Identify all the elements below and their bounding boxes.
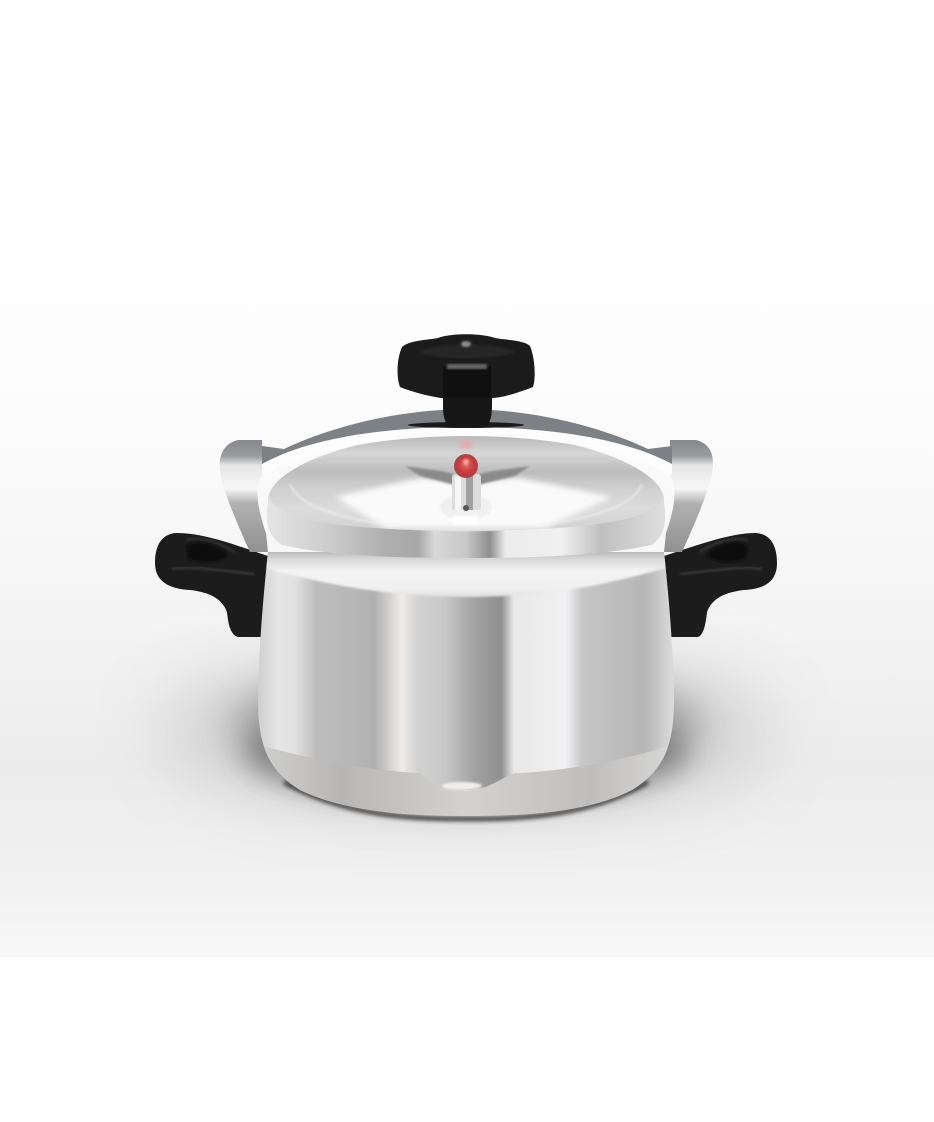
arch grey upper band xyxy=(262,409,672,470)
lid xyxy=(267,433,665,558)
knob stem xyxy=(443,368,492,427)
locking knob xyxy=(398,334,535,428)
red reflection xyxy=(459,439,473,449)
left side clamp xyxy=(220,440,268,552)
product photo: pressure cooker xyxy=(0,334,934,956)
arch silver strip xyxy=(262,427,672,475)
lid bridge arch xyxy=(262,409,672,475)
right side clamp xyxy=(664,440,713,552)
body base band xyxy=(264,746,668,816)
left handle hole xyxy=(186,542,228,562)
lid dome xyxy=(268,433,664,545)
studio backdrop and floor shadow xyxy=(0,548,934,956)
knob slot shadow xyxy=(408,422,524,428)
body shoulder highlight xyxy=(266,552,666,598)
right handle xyxy=(662,533,777,637)
right handle hole xyxy=(706,542,748,562)
lid rim band xyxy=(267,495,665,558)
left handle xyxy=(155,533,272,637)
knob head xyxy=(398,334,535,398)
base dimple highlight xyxy=(442,782,482,790)
pot body xyxy=(258,552,674,816)
pressure indicator valve xyxy=(440,454,492,525)
knob bolt xyxy=(461,341,471,347)
